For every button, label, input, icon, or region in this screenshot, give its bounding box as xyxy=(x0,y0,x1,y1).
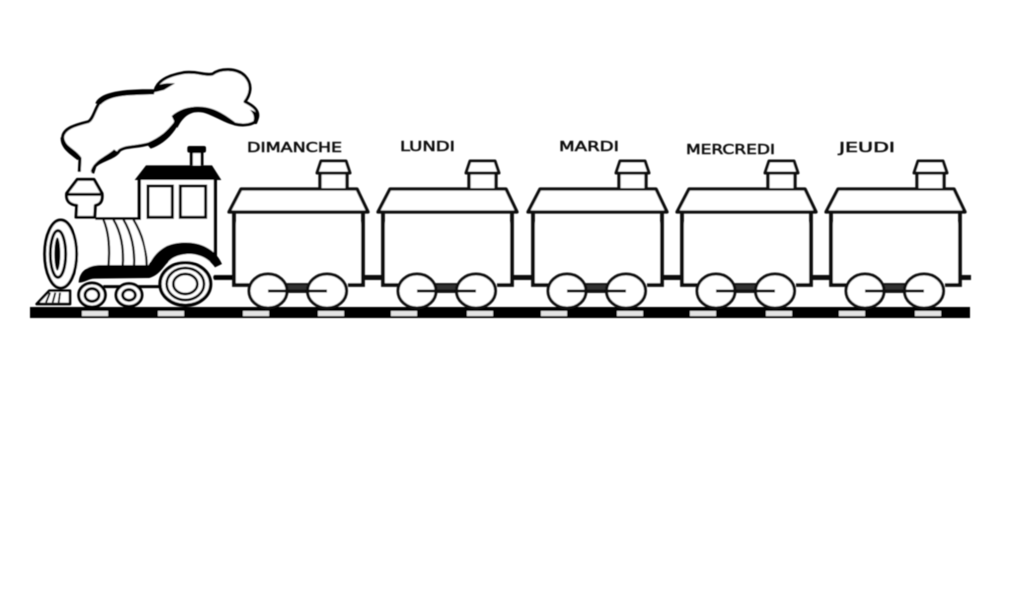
label: mardi: MARDI xyxy=(559,139,619,155)
cab roof xyxy=(135,165,221,180)
label: dimanche: DIMANCHE xyxy=(247,140,342,156)
cab windows xyxy=(148,186,172,217)
wagon 2: lundi xyxy=(378,139,517,308)
wagon 5: jeudi xyxy=(826,140,965,308)
smoke cloud xyxy=(61,70,259,173)
running board and fender xyxy=(79,243,222,283)
rail track xyxy=(30,307,970,318)
wagon 4: mercredi xyxy=(677,142,816,308)
label: jeudi: JEUDI xyxy=(837,140,895,156)
cab vent xyxy=(191,152,202,165)
chimney stack xyxy=(67,179,102,217)
wagon 3: mardi xyxy=(528,139,667,308)
boiler xyxy=(75,219,149,273)
frame and cowcatcher xyxy=(37,277,233,304)
front boiler disc xyxy=(45,220,77,288)
large driving wheel xyxy=(160,263,211,305)
locomotive xyxy=(37,70,259,307)
cab xyxy=(135,146,221,262)
wagon 1: dimanche xyxy=(229,140,368,308)
couplings between cars xyxy=(214,275,971,280)
label: lundi: LUNDI xyxy=(400,139,455,155)
label: mercredi: MERCREDI xyxy=(686,142,775,158)
small front wheels xyxy=(79,283,142,307)
